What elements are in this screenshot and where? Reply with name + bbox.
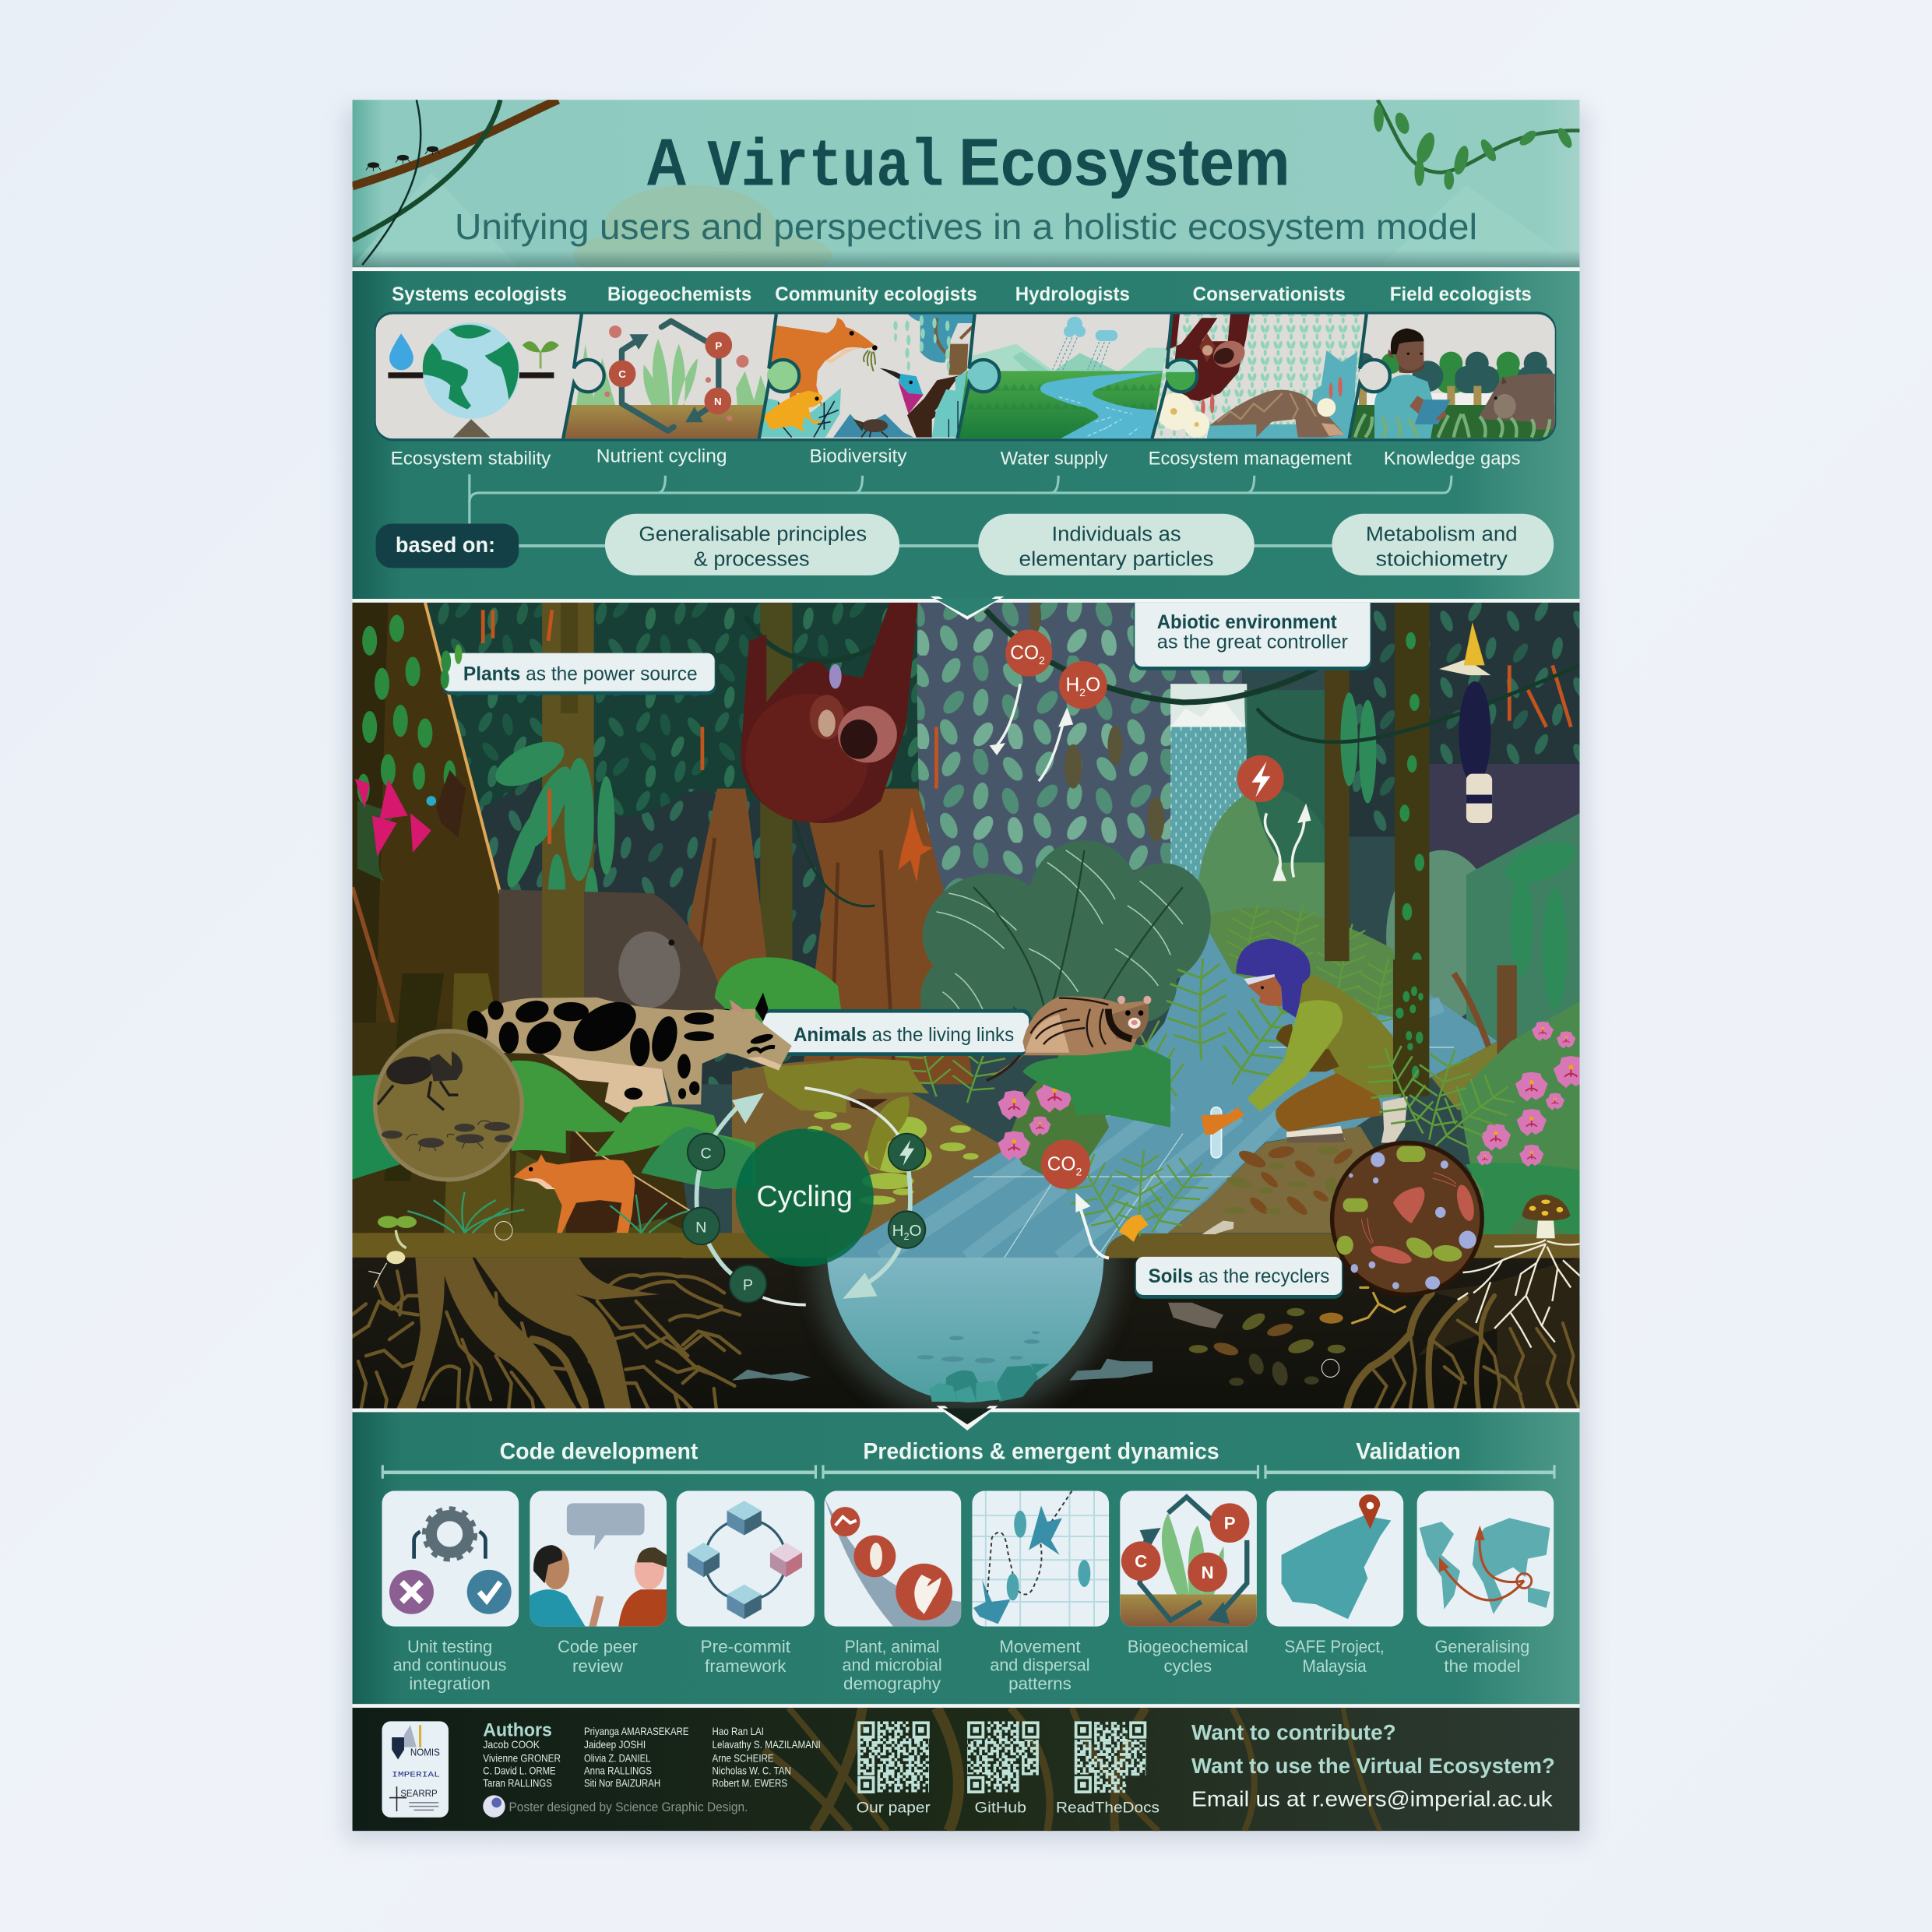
card: movement and dispersal: [972, 1491, 1109, 1627]
authors: Siti Nor BAIZURAH: [584, 1777, 660, 1789]
user labels: Hydrologists: [1015, 284, 1130, 305]
left big trunk: [353, 603, 548, 1236]
logos card: IMPERIAL: [392, 1771, 440, 1780]
frog: [1119, 1215, 1149, 1242]
authors: Authors: [483, 1720, 552, 1740]
user labels: Systems ecologists: [392, 284, 567, 305]
section headings: Code development: [500, 1439, 699, 1464]
large patterned leaves: [906, 840, 1224, 1045]
exchange arrows: [997, 684, 1304, 878]
understory: [480, 603, 1579, 1084]
main roots: [384, 1258, 660, 1432]
cycling diagram: [683, 1088, 925, 1305]
strip panel: hydrologists: [950, 317, 1174, 440]
poster shadow: [345, 108, 1587, 1841]
soil leaves: [1168, 1303, 1346, 1388]
benefit labels: Knowledge gaps: [1384, 449, 1521, 470]
card captions: and dispersal: [990, 1656, 1090, 1675]
pill: individuals: Individuals as: [1051, 523, 1181, 546]
right mid greenery: [1198, 690, 1579, 1109]
card captions: Malaysia: [1302, 1656, 1367, 1676]
title: Ecosystem: [959, 125, 1290, 199]
card captions: Generalising: [1435, 1637, 1529, 1656]
waterfall and sky: [1170, 684, 1247, 931]
right orchids: [1476, 1022, 1589, 1167]
authors: [483, 1720, 821, 1789]
panel: footer: [353, 1708, 1579, 1831]
strip panel: biogeochemists: P: [715, 340, 722, 351]
mushroom: [1522, 1195, 1570, 1238]
strip panel: biogeochemists: C: [618, 368, 626, 380]
orchids and shrubs at river bank: [998, 1034, 1170, 1177]
front green leaves: [512, 1061, 755, 1189]
QR code: our paper: [857, 1723, 929, 1792]
divider with chevron into scene: [353, 596, 1579, 620]
cycling diagram: O: [909, 1222, 921, 1240]
molecule badges: 2: [1076, 1166, 1082, 1178]
vine top right: [1374, 100, 1579, 190]
mouse deer: [513, 1154, 635, 1233]
hornbill: [1439, 622, 1492, 823]
card captions: cycles: [1163, 1656, 1212, 1676]
pill: individuals: elementary particles: [1019, 547, 1214, 570]
mid foliage: [917, 603, 1242, 986]
benefit labels: Biodiversity: [810, 446, 907, 466]
pill: generalisable principles: Generalisable principles: [639, 523, 867, 546]
strip panel: systems ecologists: [388, 322, 559, 438]
authors: Lelavathy S. MAZILAMANI: [713, 1739, 821, 1751]
red fruit strands: [483, 610, 1571, 844]
authors: Jacob COOK: [483, 1739, 540, 1751]
ants: [366, 146, 440, 171]
QR labels: Our paper: [857, 1800, 931, 1817]
card: unit testing: [382, 1491, 519, 1627]
card captions: integration: [409, 1673, 491, 1693]
fine roots: [352, 1271, 740, 1432]
pill: individuals: [978, 514, 1255, 575]
callout: abiotic environment: Abiotic environment: [1157, 612, 1337, 633]
right-side plants: [1454, 973, 1579, 1236]
contact call to action: Want to use the Virtual Ecosystem?: [1191, 1754, 1555, 1778]
card captions: Code peer: [558, 1637, 638, 1656]
callout: animals: Animals as the living links: [794, 1025, 1014, 1046]
divider with chevron into outputs: [353, 1406, 1579, 1431]
card captions: demography: [843, 1673, 941, 1693]
contact call to action: [1191, 1720, 1555, 1811]
authors: Olivia Z. DANIEL: [584, 1753, 651, 1765]
card captions: SAFE Project,: [1285, 1637, 1385, 1656]
benefit labels: Ecosystem management: [1149, 449, 1352, 470]
based on tag: based on:: [396, 533, 495, 557]
card: demography: [825, 1491, 961, 1627]
broad hanging leaves: [489, 692, 1581, 1010]
puzzle seams: [563, 314, 1390, 438]
molecule badges: 2: [1079, 687, 1086, 699]
user labels: [392, 284, 1532, 305]
pink flowers and sunbird: [355, 770, 466, 881]
card captions: Plant, animal: [845, 1637, 939, 1656]
buried fragments: [732, 1359, 1153, 1381]
contact call to action: Want to contribute?: [1191, 1720, 1396, 1744]
callout: animals: [762, 1009, 1031, 1056]
title: A: [646, 125, 688, 199]
benefit labels: Ecosystem stability: [391, 449, 551, 470]
authors: Hao Ran LAI: [713, 1726, 764, 1737]
left forest floor and roots: [352, 973, 767, 1432]
benefit labels: [391, 446, 1521, 470]
card: pre-commit framework: [677, 1491, 815, 1627]
strip panel: biogeochemists: N: [714, 396, 722, 407]
card captions: Movement: [999, 1637, 1081, 1656]
logos card: NOMIS: [410, 1747, 440, 1758]
civet: [987, 996, 1153, 1121]
card: generalising the model: [1417, 1491, 1554, 1627]
title: Virtual: [707, 129, 944, 205]
benefit labels: Nutrient cycling: [596, 446, 727, 466]
card: biogeochemical cycles: [1120, 1491, 1257, 1627]
user labels: Biogeochemists: [607, 284, 751, 305]
cycling diagram: 2: [903, 1231, 909, 1242]
panel: outputs: [353, 1412, 1579, 1704]
river: [825, 918, 1497, 1258]
sprout: [368, 1216, 417, 1287]
QR labels: [857, 1800, 1160, 1817]
card captions: Biogeochemical: [1128, 1637, 1248, 1656]
based on tag: [376, 523, 519, 568]
molecule badges: O: [1086, 675, 1100, 696]
callout: soils: [1135, 1257, 1343, 1299]
section headings: Validation: [1356, 1439, 1461, 1464]
cycling diagram: C: [701, 1145, 712, 1162]
card captions: [393, 1637, 1529, 1693]
strip panel: field ecologists: [1350, 329, 1557, 440]
ground band overlay: [1168, 1234, 1581, 1258]
card captions: the model: [1444, 1656, 1521, 1676]
pill: metabolism: Metabolism and: [1366, 523, 1518, 546]
pill: generalisable principles: & processes: [694, 547, 810, 570]
mid trees: [542, 603, 1429, 1096]
callout: abiotic environment: as the great controller: [1157, 632, 1348, 653]
card: biogeochemical cycles: C: [1135, 1552, 1147, 1571]
cycling diagram: P: [743, 1277, 753, 1294]
benefit labels: Water supply: [1001, 449, 1108, 470]
ferns: [882, 955, 1314, 1112]
callout: abiotic environment: [1134, 596, 1371, 670]
QR code: ReadTheDocs: [1075, 1721, 1146, 1793]
QR labels: GitHub: [975, 1800, 1026, 1817]
vines top left: [353, 100, 558, 265]
card captions: Unit testing: [407, 1637, 492, 1656]
logos card: [382, 1721, 449, 1818]
QR labels: ReadTheDocs: [1056, 1800, 1160, 1817]
authors: Vivienne GRONER: [483, 1753, 561, 1765]
callout: plants: Plants as the power source: [463, 663, 698, 684]
leopard head: [714, 993, 792, 1071]
strip panel: conservationists: [1157, 313, 1373, 442]
subtitle: Unifying users and perspectives in a holistic ecosystem model: [455, 206, 1477, 247]
beetle and ants inset: [375, 1031, 522, 1180]
strip panel: community ecologists: [758, 308, 981, 438]
callout: plants: [441, 645, 716, 695]
CO2 up arrow from pool: [1079, 1205, 1109, 1258]
panel: title header: [353, 100, 1579, 277]
authors: Taran RALLINGS: [483, 1777, 552, 1789]
section headings: [500, 1439, 1461, 1464]
soil microbes inset: [1332, 1142, 1482, 1295]
lizard: [898, 807, 933, 882]
cycling diagram: N: [695, 1219, 706, 1236]
soil ground layers: [353, 1233, 1579, 1409]
title: [647, 137, 1286, 199]
illustrated strip: [375, 308, 1557, 442]
researcher: [1236, 939, 1311, 1019]
QR code: GitHub: [967, 1721, 1039, 1793]
cycling diagram: H: [892, 1222, 903, 1240]
bright shrub: [715, 957, 843, 1022]
contact call to action: Email us at r.ewers@imperial.ac.uk: [1191, 1787, 1553, 1811]
pill: generalisable principles: [605, 514, 899, 575]
section headings: Predictions & emergent dynamics: [863, 1439, 1219, 1464]
user labels: Field ecologists: [1390, 284, 1532, 305]
card: biogeochemical cycles: P: [1224, 1514, 1236, 1533]
molecule badges: CO: [1010, 643, 1039, 664]
authors: C. David L. ORME: [483, 1765, 556, 1776]
authors: Anna RALLINGS: [584, 1765, 652, 1776]
leopard body: [467, 998, 755, 1104]
card captions: review: [572, 1656, 624, 1676]
user labels: Conservationists: [1193, 284, 1346, 305]
trunk with climbers: [1393, 959, 1428, 1096]
molecule badges: [1005, 630, 1284, 1189]
card captions: and microbial: [842, 1656, 942, 1675]
molecule badges: H: [1065, 675, 1079, 696]
card: code peer review: [530, 1491, 667, 1627]
logos card: SEARRP: [400, 1788, 438, 1799]
hanging pods: [1029, 599, 1164, 842]
pill: metabolism: [1332, 514, 1554, 575]
right bush: [1458, 1001, 1581, 1241]
callout: soils: Soils as the recyclers: [1149, 1266, 1329, 1287]
molecule badges: 2: [1039, 655, 1045, 667]
authors: Jaideep JOSHI: [584, 1739, 646, 1751]
panel: rainforest scene: [352, 596, 1589, 1432]
card captions: Pre-commit: [701, 1637, 790, 1656]
card captions: patterns: [1008, 1673, 1072, 1693]
near ferns: [1050, 1038, 1522, 1246]
section brackets: [382, 1465, 1554, 1479]
distant trunk: [1497, 965, 1517, 1088]
tapir: [499, 889, 727, 1022]
pool halo: [813, 1111, 1119, 1417]
white divider: [353, 267, 1579, 271]
strip panel: biogeochemists: [561, 321, 771, 442]
orangutan with baby: [741, 603, 918, 823]
authors: Nicholas W. C. TAN: [713, 1765, 791, 1776]
cycling diagram: Cycling: [757, 1181, 853, 1213]
designer credit: [483, 1795, 748, 1818]
canopy: [353, 603, 993, 852]
leaf litter, researcher and microbes: [1168, 939, 1581, 1408]
grass tufts: [407, 1192, 688, 1233]
card: SAFE project: [1267, 1491, 1403, 1627]
authors: Priyanga AMARASEKARE: [584, 1726, 689, 1737]
card captions: framework: [705, 1656, 787, 1676]
molecule badges: CO: [1047, 1154, 1076, 1175]
right roots: [1418, 1258, 1581, 1408]
vines: [745, 603, 1579, 906]
user labels: Community ecologists: [775, 284, 977, 305]
cycle nodes: [683, 1134, 925, 1302]
water cycle pool: [732, 1258, 1153, 1402]
fern hillside: [1202, 905, 1417, 1035]
white divider: [353, 1704, 1579, 1708]
authors: Robert M. EWERS: [713, 1777, 787, 1789]
designer credit: Poster designed by Science Graphic Design.: [509, 1800, 748, 1814]
mycelium: [1458, 1240, 1581, 1348]
authors: Arne SCHEIRE: [713, 1753, 774, 1765]
pill: metabolism: stoichiometry: [1376, 547, 1508, 570]
card captions: and continuous: [393, 1656, 506, 1675]
card: biogeochemical cycles: N: [1202, 1563, 1214, 1582]
panel: users and perspectives: [353, 271, 1579, 599]
puzzle knob fills: [572, 360, 1391, 392]
mossy bank with pools: [732, 1058, 1007, 1260]
